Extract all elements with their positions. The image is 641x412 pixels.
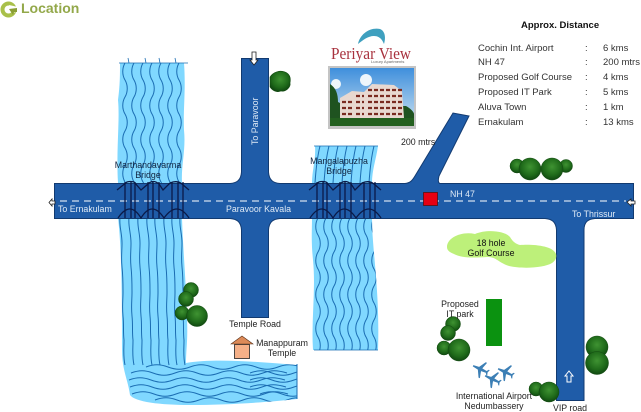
trees: VIP road left <box>529 382 559 402</box>
marker: project site <box>424 192 438 206</box>
icon: temple <box>231 336 253 358</box>
logo: Periyar View <box>331 29 412 64</box>
arrow: VIP road <box>565 371 573 382</box>
road labels: Paravoor Kavala <box>226 204 291 214</box>
table rows: Proposed IT Park <box>478 87 552 98</box>
road labels: To Paravoor <box>250 98 260 145</box>
icon: airplanes <box>469 358 517 391</box>
distance table <box>478 20 640 128</box>
golf course <box>447 231 556 268</box>
roads <box>54 58 634 400</box>
label: International Airport: International Airport <box>456 391 532 401</box>
trees: NH 47 <box>510 158 572 180</box>
road labels: To Thrissur <box>572 209 615 219</box>
table rows: 200 mtrs <box>603 57 640 68</box>
table rows: : <box>585 102 588 113</box>
table rows: Proposed Golf Course <box>478 72 572 83</box>
bridge: Mangalapuzha <box>309 182 381 218</box>
label: Manappuram Temple: Manappuram <box>256 338 308 348</box>
road labels: NH 47 <box>450 189 475 199</box>
label: Proposed IT park: IT park <box>446 309 474 319</box>
label: Mangalapuzha Bridge: Mangalapuzha <box>310 156 368 166</box>
logo: Periyar View: Periyar View <box>331 44 412 63</box>
table rows: 4 kms <box>603 72 629 83</box>
photo: apartment building <box>328 66 416 129</box>
table heading: Approx. Distance <box>521 20 599 31</box>
label: International Airport: Nedumbassery <box>464 401 524 411</box>
river: Marthandavarma <box>117 58 298 405</box>
heading: Location: Location <box>21 0 79 16</box>
road labels <box>58 98 615 219</box>
table rows: : <box>585 43 588 54</box>
label: Temple Road: Temple Road <box>229 319 281 329</box>
label: Marthandavarma Bridge: Marthandavarma <box>115 160 181 170</box>
trees: IT park <box>437 316 470 361</box>
label: 200 mtrs: 200 mtrs <box>401 137 436 147</box>
river: Mangalapuzha <box>312 146 378 354</box>
label: Proposed IT park: Proposed <box>441 299 479 309</box>
table rows: : <box>585 57 588 68</box>
table rows: 1 km <box>603 102 624 113</box>
table rows: Aluva Town <box>478 102 526 113</box>
trees: river bank <box>175 282 208 326</box>
icon: location swirl <box>2 4 18 16</box>
table rows <box>478 43 640 128</box>
bridge: Marthandavarma <box>117 182 189 218</box>
table rows: NH 47 <box>478 57 505 68</box>
logo: Periyar View: Luxury Apartments <box>371 59 404 64</box>
label: Mangalapuzha Bridge: Bridge <box>326 166 352 176</box>
table rows: 5 kms <box>603 87 629 98</box>
arrow: to Thrissur <box>627 199 635 206</box>
trees: VIP road right <box>586 336 608 374</box>
arrow: to Ernakulam <box>49 199 55 206</box>
label: Marthandavarma Bridge: Bridge <box>135 170 161 180</box>
tree: Paravoor road <box>270 71 290 92</box>
label: Manappuram Temple: Temple <box>268 348 296 358</box>
table rows: 13 kms <box>603 117 634 128</box>
table rows: : <box>585 87 588 98</box>
table rows: : <box>585 117 588 128</box>
table rows: Ernakulam <box>478 117 523 128</box>
table rows: Cochin Int. Airport <box>478 43 554 54</box>
table rows: 6 kms <box>603 43 629 54</box>
road labels: To Ernakulam <box>58 204 112 214</box>
label: golf course: Golf Course <box>468 248 515 258</box>
IT park block <box>486 299 502 346</box>
arrow: to Paravoor <box>250 52 258 65</box>
label: golf course: 18 hole <box>477 238 505 248</box>
table rows: : <box>585 72 588 83</box>
